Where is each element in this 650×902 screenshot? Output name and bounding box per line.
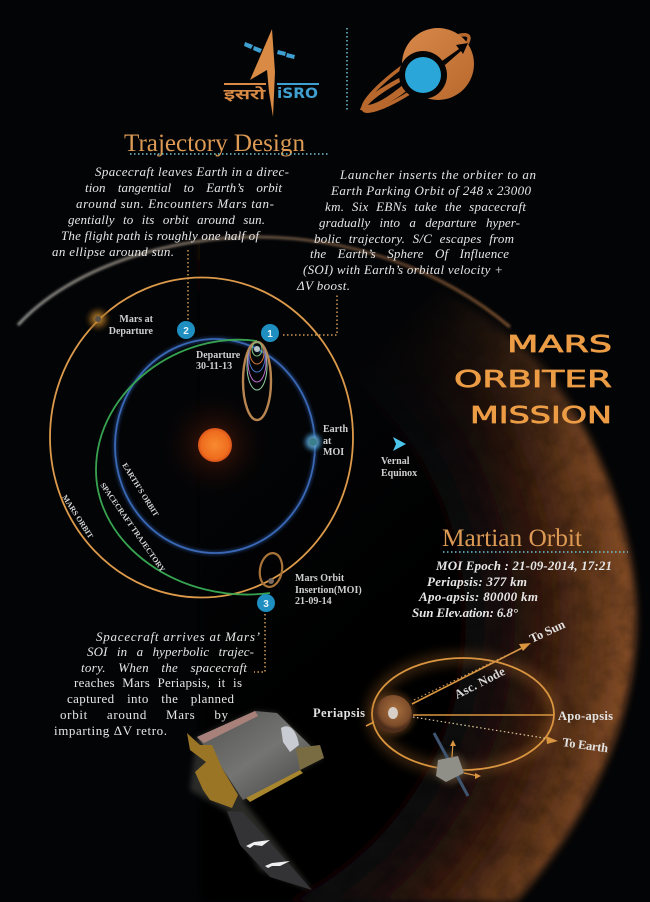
logotype: Latin: iSRO	[277, 86, 318, 102]
text block: arrival description: tory. When the spacecraft	[81, 660, 247, 675]
text block: orbit parameters: Apo-apsis: 80000 km	[418, 589, 538, 604]
text block: trajectory description: Spacecraft leaves Earth in a direc-	[95, 164, 289, 179]
text block: orbit parameters	[412, 558, 612, 620]
Mars orbit insertion loop	[257, 551, 285, 589]
Mars Orbiter Mission logo	[356, 26, 476, 120]
text block: orbit parameters: Sun Elev.ation: 6.8°	[412, 605, 519, 620]
text block: launcher description: bolic trajectory. S/C escapes from	[314, 231, 514, 246]
label: Earth at MOI	[323, 424, 348, 458]
vernal equinox marker: Equinox	[381, 468, 417, 479]
vernal equinox marker	[381, 437, 417, 479]
icon: satellite panels	[244, 42, 295, 59]
planet Mars backdrop	[18, 235, 650, 902]
Mars orbit	[50, 278, 353, 598]
orbit glow	[372, 658, 554, 770]
Earth at MOI	[300, 429, 326, 455]
label: Mars Orbit Insertion	[295, 573, 362, 607]
glow	[190, 711, 323, 890]
text block: trajectory description: tion tangential to Earth’s orbit	[85, 180, 282, 195]
spacecraft trajectory	[96, 340, 270, 595]
badge 2: 2	[183, 326, 189, 337]
solar panel	[227, 811, 312, 890]
text block: arrival description: reaches Mars Periapsis, it is	[74, 675, 242, 690]
text block: launcher description: gradually into a departure hyper-	[319, 215, 520, 230]
label: Mars at Departure: Departure	[109, 326, 154, 337]
icon: black ring	[399, 51, 447, 99]
curved label: Earth's orbit: EARTH’S ORBIT	[120, 461, 161, 519]
heading: Martian Orbit: Martian Orbit	[442, 525, 582, 552]
badge 3: 3	[263, 599, 269, 610]
label: Periapsis: Periapsis	[313, 706, 365, 720]
curved label: Mars orbit: MARS ORBIT	[60, 493, 96, 541]
text block: launcher description: Launcher inserts the orbiter to an	[339, 167, 536, 182]
label: Apo-apsis: Apo-apsis	[558, 709, 613, 723]
logotype bars	[224, 83, 319, 85]
orbit ellipse	[372, 658, 554, 770]
label: Earth at MOI: Earth	[323, 424, 348, 435]
text block: arrival description: captured into the planned	[67, 691, 234, 706]
icon: arrow	[393, 437, 406, 451]
text block: launcher description	[296, 167, 536, 293]
icon: blue planet	[405, 57, 441, 93]
gold edge	[246, 770, 303, 802]
text block: trajectory description: an ellipse around sun.	[52, 244, 174, 259]
badge 2	[177, 321, 195, 339]
icon: rocket	[250, 29, 275, 117]
Mars at departure	[83, 304, 113, 334]
text block: arrival description: orbit around Mars by	[60, 707, 228, 722]
spacecraft illustration	[187, 711, 324, 890]
title: Mars Orbiter Mission: MISSION	[470, 401, 612, 429]
Earth's orbit	[115, 339, 315, 553]
label: Mars Orbit Insertion: Insertion(MOI)	[295, 585, 362, 596]
line: apsides	[413, 714, 553, 716]
ISRO logo	[222, 29, 319, 117]
panel highlights	[246, 840, 290, 868]
curved label: spacecraft trajectory: SPACECRAFT TRAJECTORY	[98, 481, 167, 574]
label: Earth at MOI: MOI	[323, 447, 344, 458]
arrow: to sun	[412, 643, 531, 704]
label: To Earth: To Earth	[562, 735, 609, 755]
text block: trajectory description: The flight path is roughly one half of	[61, 228, 261, 243]
text block: arrival description: SOI in a hyperbolic trajec-	[87, 644, 254, 659]
logo divider	[346, 28, 348, 112]
text block: trajectory description: around sun. Encounters Mars tan-	[76, 196, 274, 211]
Martian orbit diagram	[313, 617, 613, 796]
line: periapsis tick	[366, 722, 374, 726]
badge 1	[261, 324, 279, 342]
text block: launcher description: Earth Parking Orbit of 248 x 23000	[330, 183, 532, 198]
right deck	[296, 745, 324, 770]
text block: launcher description: km. Six EBNs take the spacecraft	[325, 199, 526, 214]
icon: ring front	[360, 75, 413, 110]
text block: arrival description	[54, 629, 260, 738]
text block: orbit parameters: Periapsis: 377 km	[427, 574, 527, 589]
icon: sun	[198, 428, 232, 462]
arrow: to earth	[413, 717, 558, 744]
text block: orbit parameters: MOI Epoch : 21-09-2014, 17:21	[435, 558, 612, 573]
parking orbits at departure	[243, 342, 271, 420]
gold insulation	[187, 733, 238, 808]
title: Mars Orbiter Mission: MARS	[507, 330, 612, 358]
pink edge	[197, 711, 258, 743]
text block: arrival description: imparting ΔV retro.	[54, 723, 167, 738]
icon: orange planet	[402, 28, 474, 100]
text block: launcher description: (SOI) with Earth’s orbital velocity +	[303, 262, 503, 277]
label: Mars Orbit Insertion: 21-09-14	[295, 596, 332, 607]
text block: arrival description: Spacecraft arrives at Mars’	[96, 629, 260, 644]
sun glow	[157, 387, 273, 503]
title: Mars Orbiter Mission: ORBITER	[454, 365, 612, 393]
label: To Sun: To Sun	[527, 617, 567, 646]
label: Mars at Departure: Mars at	[119, 314, 154, 325]
trajectory diagram	[50, 250, 362, 672]
small spacecraft	[434, 733, 481, 796]
text block: launcher description: the Earth’s Sphere Of Influence	[310, 246, 509, 261]
heading: Trajectory Design: Trajectory Design	[124, 130, 305, 157]
label: Asc. Node: Asc. Node	[452, 664, 508, 702]
label: Departure date	[196, 350, 241, 372]
logotype: Hindi: इसरो	[222, 86, 267, 102]
label: Departure date: 30-11-13	[196, 361, 232, 372]
vernal equinox marker: Vernal	[381, 456, 410, 467]
label: Mars Orbit Insertion: Mars Orbit	[295, 573, 345, 584]
callout connectors	[188, 250, 337, 672]
text block: trajectory description: gentially to its orbit around sun.	[68, 212, 265, 227]
icon: arrow	[442, 43, 468, 65]
icon: ring back	[356, 26, 476, 120]
text block: launcher description: ΔV boost.	[296, 278, 350, 293]
silver dome	[281, 726, 299, 752]
badge 1: 1	[267, 329, 273, 340]
label: Mars at Departure	[109, 314, 154, 337]
label: Earth at MOI: at	[323, 436, 332, 447]
label: Departure date: Departure	[196, 350, 241, 361]
spacecraft body	[197, 711, 323, 800]
icon: Mars	[371, 692, 415, 736]
title: Mars Orbiter Mission	[454, 330, 612, 429]
text block: trajectory description	[52, 164, 289, 259]
badge 3	[257, 594, 275, 612]
